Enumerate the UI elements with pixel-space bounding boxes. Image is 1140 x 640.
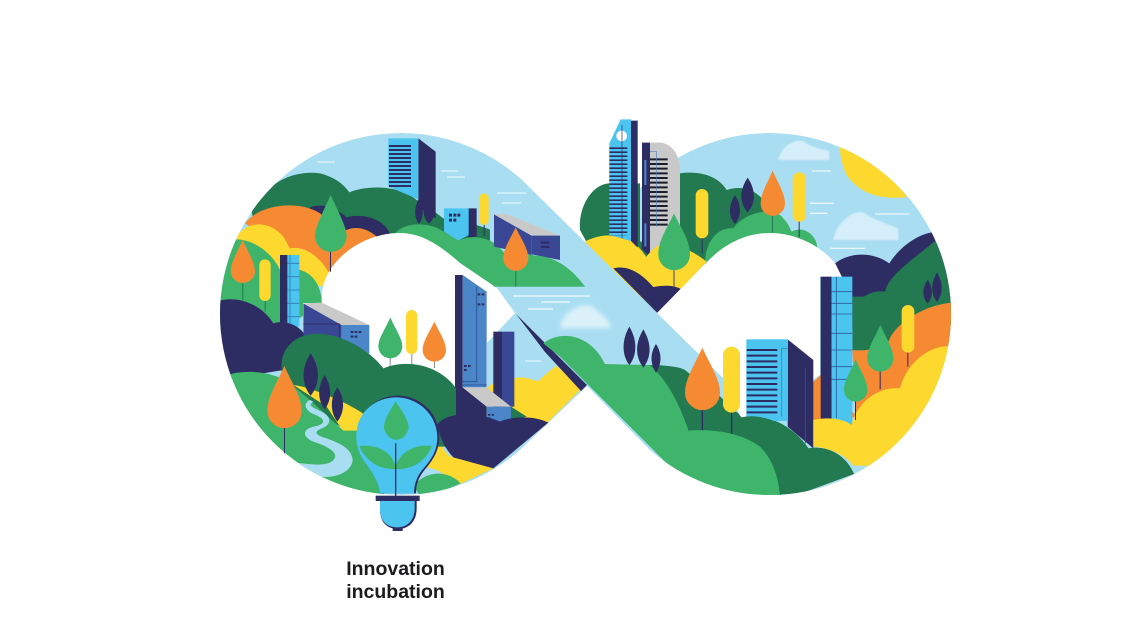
sliver sky fill right of towers	[575, 386, 586, 398]
sun	[840, 147, 907, 198]
caption: incubation	[346, 581, 445, 603]
dark green foreground hill	[688, 387, 854, 495]
grid tower right	[821, 277, 852, 425]
tree trio	[378, 310, 446, 370]
yellow tree	[696, 189, 708, 253]
mid green hill	[220, 239, 322, 333]
yellow tree	[479, 193, 489, 236]
navy trees	[415, 195, 435, 224]
front navy hill	[437, 414, 548, 468]
upper left sky lines	[317, 162, 526, 203]
navy sliver	[516, 314, 587, 391]
navy trees right	[923, 272, 942, 304]
green slope	[230, 372, 384, 494]
slanted building	[303, 303, 369, 353]
grey roof building	[494, 213, 560, 260]
green tree small	[844, 359, 867, 420]
yellow slope	[293, 385, 365, 432]
lower right hills	[543, 297, 953, 500]
yellow hill	[584, 235, 705, 309]
sky background	[220, 133, 951, 495]
navy valley	[613, 267, 681, 313]
navy hill lower left front	[217, 299, 304, 380]
dark green hills	[252, 172, 490, 241]
icon: light bulb	[356, 396, 439, 531]
yellow tree far right	[902, 305, 914, 367]
dark green hill with trees	[282, 334, 456, 447]
lower left back hills	[416, 360, 586, 494]
orange tree	[267, 366, 302, 453]
green slope with river	[230, 372, 384, 494]
grey building base	[463, 387, 511, 427]
green tree	[658, 213, 690, 287]
upper right towers and trees	[609, 119, 942, 304]
lower right buildings and trees	[624, 277, 854, 495]
river band	[293, 400, 353, 477]
orange hill	[245, 205, 377, 280]
dark green back hill	[650, 365, 854, 500]
green low hill	[416, 474, 461, 494]
dark green right hill	[864, 241, 951, 348]
large green tree	[315, 195, 347, 272]
navy hill	[308, 206, 390, 236]
orange tree	[685, 348, 720, 430]
dark green hill behind towers	[580, 172, 764, 266]
bulb glass	[357, 396, 439, 493]
stem	[395, 443, 396, 496]
yellow tree left	[259, 259, 271, 312]
foreground left trees and buildings	[267, 353, 548, 468]
side tower	[493, 332, 514, 408]
navy trees	[304, 353, 343, 422]
right hole	[657, 233, 842, 418]
green tree tall	[867, 325, 893, 389]
navy right hill	[835, 232, 960, 328]
tower top	[388, 138, 436, 218]
right foreground trees	[844, 305, 914, 420]
clouds	[778, 141, 898, 240]
yellow tree	[723, 347, 740, 434]
lower left buildings, hill and trees	[282, 275, 514, 447]
upper left buildings and trees	[231, 138, 585, 330]
yellow tree right	[793, 172, 806, 237]
blue tower	[609, 119, 638, 248]
blue office block	[746, 339, 813, 448]
yellow front right hill	[813, 346, 953, 466]
yellow front hill	[635, 244, 707, 288]
caption: Innovation	[346, 558, 445, 580]
dark green right fill	[852, 297, 953, 350]
diagonal sky band	[490, 178, 650, 450]
infinity scene	[217, 119, 960, 500]
grid tower left	[280, 255, 299, 330]
left lobe back hills	[220, 173, 510, 333]
grey tower	[642, 143, 680, 257]
orange tree	[503, 227, 528, 287]
orange tree left	[231, 240, 255, 300]
sky band details	[513, 296, 611, 328]
tall building	[455, 275, 487, 422]
navy trees	[624, 327, 660, 373]
dark green patch	[510, 406, 527, 418]
bright green front hill	[543, 336, 781, 500]
orange right hill	[812, 302, 953, 425]
yellow low hill	[426, 446, 494, 484]
yellow band	[236, 224, 331, 287]
small blue building	[444, 208, 477, 241]
front green patch	[493, 256, 585, 287]
bulb base	[380, 501, 417, 529]
leaves	[359, 401, 432, 469]
right lobe background	[577, 141, 960, 348]
mid green arch hill	[705, 212, 818, 264]
left hole	[303, 233, 515, 400]
orange tree	[761, 171, 785, 233]
navy trees	[730, 178, 754, 224]
yellow right hill	[813, 346, 953, 466]
cloud on band	[560, 305, 611, 328]
upper left green hill	[395, 224, 585, 287]
yellow hill right	[487, 366, 582, 423]
